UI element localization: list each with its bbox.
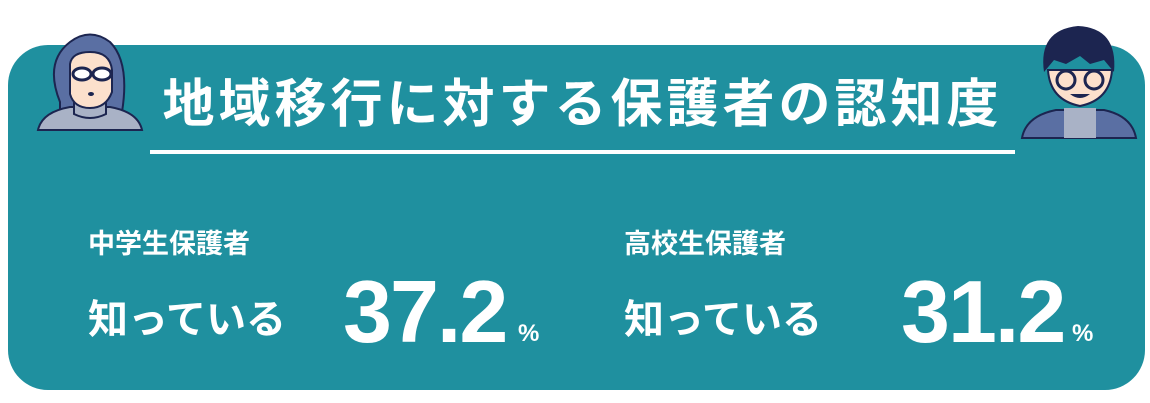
block: junior high — [88, 229, 539, 361]
icon: man — [1020, 26, 1138, 139]
title: 地域移行に対する保護者の認知度 — [162, 76, 1002, 134]
block: high school — [624, 229, 1093, 361]
title underline — [150, 150, 1015, 154]
label: 高校生保護者 — [624, 229, 786, 259]
unit: % — [518, 320, 539, 347]
icon: woman — [36, 34, 144, 131]
value: 31.2 — [901, 262, 1064, 361]
value: 37.2 — [343, 262, 506, 361]
unit: % — [1072, 320, 1093, 347]
text: 知っている — [88, 298, 286, 342]
text: 知っている — [624, 298, 822, 342]
label: 中学生保護者 — [88, 229, 250, 259]
